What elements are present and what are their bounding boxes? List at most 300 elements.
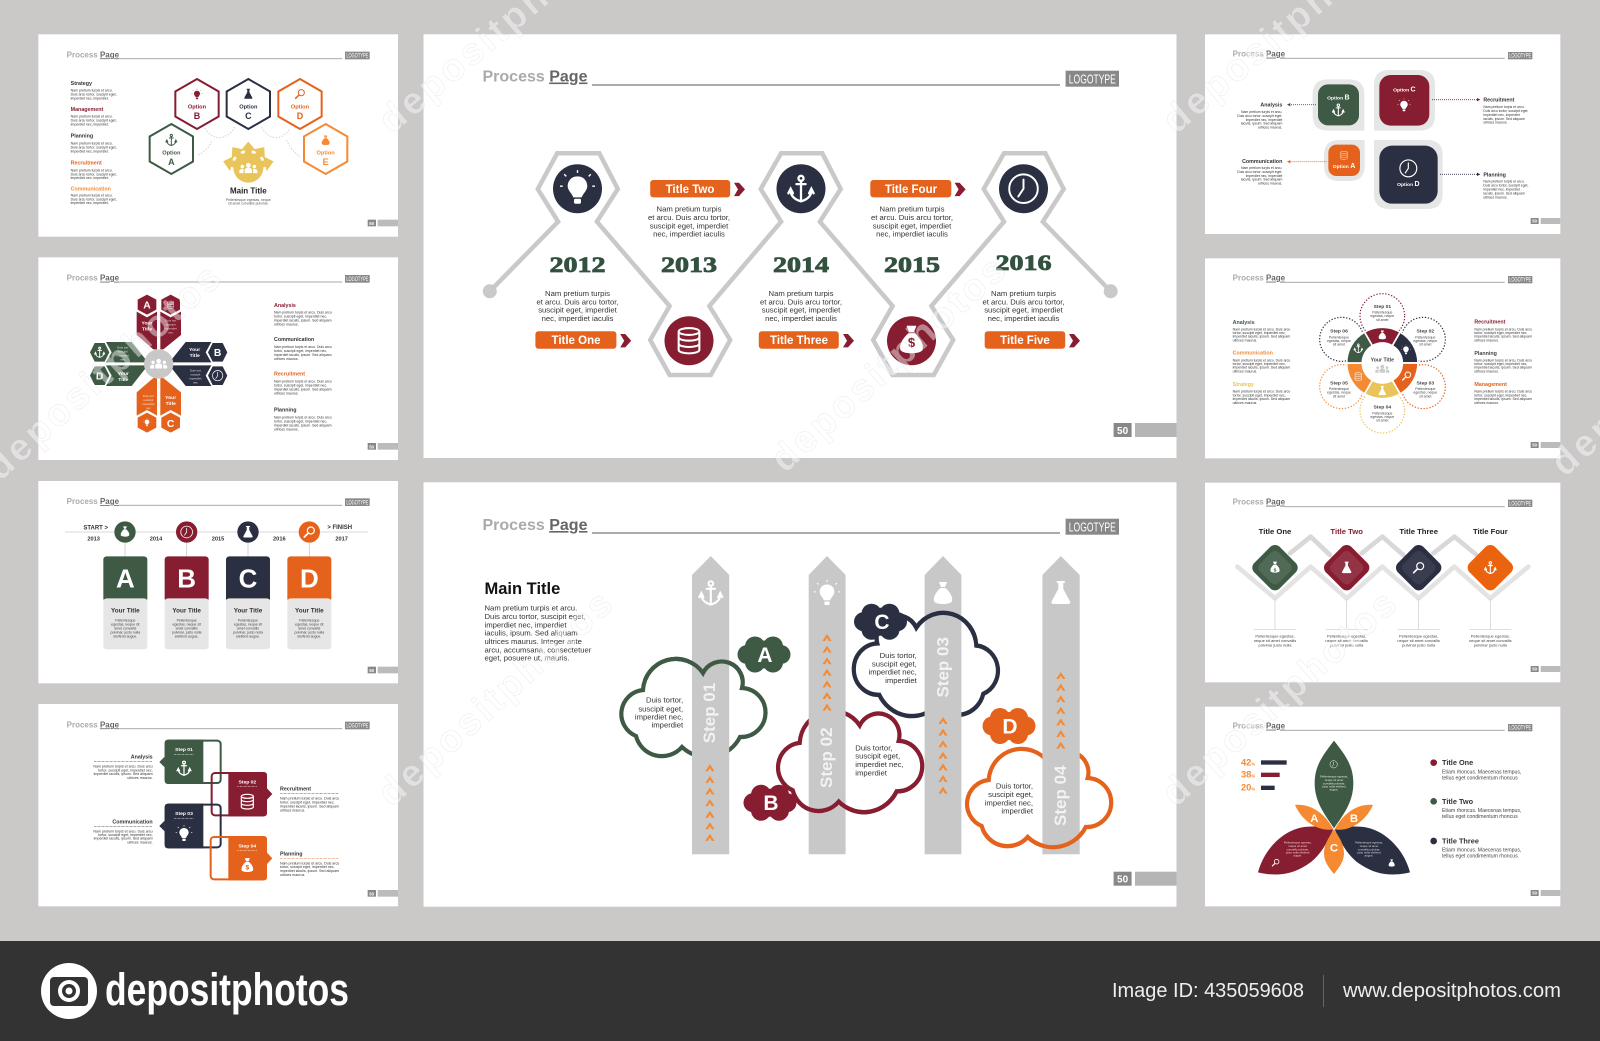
text list: right column: Nam pretium turpis et arcu. Duis arcu: [274, 379, 332, 383]
cloud text A: [635, 696, 684, 730]
step labels: sit amet: [1419, 343, 1431, 347]
leaf: navy right: Pellentesque egestas,: [1355, 841, 1383, 845]
text list: left column: imperdiet nec, imperdiet.: [71, 201, 109, 205]
option B: Option B: [1327, 95, 1350, 102]
arms: maroon: Your: [142, 320, 153, 326]
leaf: maroon left: neque sit amet: [1288, 844, 1307, 848]
watermarks: [0, 0, 1600, 815]
card D: Your Title: [295, 607, 324, 614]
arms: green: [90, 342, 145, 386]
text list: right column: Nam pretium turpis et arcu. Duis arcu: [274, 415, 332, 419]
main title text: [484, 580, 592, 663]
step 01: Step 01: [175, 747, 193, 753]
step labels: sit amet: [1333, 394, 1345, 398]
milestone: Title Three: Title Three: [770, 335, 828, 347]
cloud text B: imperdiet: [855, 768, 888, 777]
slide header: Process Page: [1233, 50, 1286, 59]
label: Recruitment: iaculis, ipsum. Sed aliquam: [1483, 117, 1525, 121]
step labels: egestas, neque: [1413, 391, 1437, 395]
card C: amet convallis: [237, 627, 259, 631]
card C: Your Title: [234, 607, 263, 614]
hexagon: option A: A: [168, 157, 175, 167]
years: 2015: [884, 252, 940, 277]
slide header: LOGOTYPE: [346, 54, 368, 60]
step 03: [159, 804, 221, 848]
milestone: Title Five: et arcu. Duis arcu tortor,: [982, 297, 1065, 306]
callout C: [854, 604, 907, 640]
milestone: Title Two: Title Two: [666, 184, 714, 196]
text list: right: Nam pretium turpis et arcu. Duis arcu: [1474, 390, 1532, 394]
text list: left column: Recruitment: [71, 161, 102, 167]
text list: left: Nam pretium turpis et arcu. Duis arcu: [1233, 390, 1290, 394]
option C: Option C: [1393, 87, 1416, 94]
text: Recruitment: Nam pretium turpis et arcu. Duis arcu: [280, 797, 339, 801]
label: Communication: imperdiet nec, imperdiet: [1246, 174, 1282, 178]
label: Communication: Nam pretium turpis et arcu.: [1241, 166, 1282, 170]
slide header: Process Page: [1233, 274, 1286, 283]
text list: left: [1233, 320, 1290, 405]
timeline: 2016: [273, 537, 286, 543]
label: Analysis: ultrices maurus.: [1258, 126, 1282, 130]
arms: orange: [137, 378, 181, 433]
label: Communication: Communication: [1242, 159, 1282, 165]
callout A: [738, 636, 790, 672]
icon: money bag circle: $: [908, 335, 916, 350]
step labels: sit amet: [1376, 318, 1388, 322]
slide header: [482, 68, 1119, 87]
label: Analysis: [1237, 103, 1282, 130]
milestone: Title One: Nam pretium turpis: [545, 289, 610, 298]
cloud outlines behind arrows: [621, 613, 1111, 847]
milestone: Title Four: nec, imperdiet iaculis: [876, 230, 948, 239]
icon: flask: [237, 521, 259, 543]
text list: right column: Nam pretium turpis et arcu. Duis arcu: [274, 345, 332, 349]
step labels: egestas, neque: [1327, 339, 1351, 343]
bar stats: [1241, 758, 1287, 793]
step 04: Step 04: [238, 843, 256, 849]
arrow: step 03: [925, 556, 961, 854]
arms: navy: B: [214, 348, 221, 359]
hexagon: option D: D: [297, 111, 304, 121]
slide header: [1233, 498, 1532, 507]
label: Communication: ultrices maurus.: [1258, 182, 1282, 186]
text list: right: tortor, suscipit eget, imperdiet nec,: [1474, 331, 1527, 335]
cloud text B: Duis tortor,: [855, 743, 892, 752]
years: 2016: [996, 250, 1052, 275]
label: Planning: ultrices maurus.: [1483, 195, 1508, 199]
text: Communication: tortor, suscipit eget, imperdiet nec,: [98, 833, 153, 837]
cloud text A: Duis tortor,: [646, 696, 683, 705]
legend: Title One: tellus eget condimentum rhoncus: [1442, 775, 1518, 781]
main title: Pellentesque egestas, neque: [226, 198, 271, 202]
text list: right: Management: [1474, 382, 1507, 388]
timeline: START >: [83, 526, 108, 532]
arms: navy: [172, 342, 227, 386]
arms: maroon: suscipit: [166, 323, 176, 327]
timeline: 2015: [212, 537, 224, 543]
text list: left column: Duis arcu tortor, suscipit eget,: [71, 172, 117, 176]
legend: Title Two: tellus eget condimentum rhoncus: [1442, 814, 1518, 820]
slide header: Process Page: [1233, 498, 1286, 507]
text list: left column: [71, 81, 117, 205]
card C: C: [239, 563, 258, 593]
text list: right column: tortor, suscipit eget, imperdiet nec,: [274, 315, 327, 319]
text list: right column: [274, 303, 332, 431]
column: Title Three: pulvinar justo nulla: [1402, 642, 1436, 647]
hexagon: option D: Option: [291, 104, 310, 110]
arms: green: nec: [120, 357, 126, 361]
text list: left column: Strategy: [71, 81, 92, 87]
card B: amet convallis: [176, 627, 198, 631]
panel: six step ring slide: [1205, 258, 1560, 458]
main title text: eget, posuere ut, mauris.: [484, 654, 570, 663]
icon: clock circle: [999, 164, 1048, 213]
column: Title Three: Pellentesque egestas,: [1399, 634, 1438, 639]
text: Planning: imperdiet iaculis, ipsum. Sed aliquam: [280, 869, 339, 873]
milestone: Title Three: suscipit eget, imperdiet: [762, 306, 841, 315]
column: Title Two: neque sit amet convallis: [1325, 638, 1368, 643]
leaf: green top: [1315, 741, 1353, 828]
zigzag lines: [1237, 537, 1528, 598]
cloud text D: Duis tortor,: [996, 782, 1033, 791]
panel: hexagon options slide: [38, 34, 398, 237]
label: Planning: [1483, 173, 1528, 199]
arrowheads: [1287, 98, 1480, 176]
panel: three leaf slide: [1205, 707, 1560, 906]
column: Title Two: Title Two: [1330, 527, 1363, 536]
arrow: step 04: Step 04: [1051, 765, 1070, 826]
text list: right: imperdiet iaculis, ipsum. Sed aliquam: [1474, 397, 1532, 401]
leaf: navy right: convallis pulvinar,: [1358, 847, 1380, 851]
years: 2014: [773, 252, 829, 277]
column: Title One: Title One: [1259, 527, 1291, 536]
label: Analysis: Analysis: [1260, 103, 1282, 109]
column: Title Two: pulvinar justo nulla: [1330, 642, 1364, 647]
divider: [1323, 975, 1324, 1007]
text list: left column: Duis arcu tortor, suscipit eget,: [71, 197, 117, 201]
slide header: LOGOTYPE: [1069, 520, 1116, 534]
page number: [368, 220, 398, 226]
text list: right column: imperdiet iaculis, ipsum. Sed aliquam: [274, 319, 332, 323]
cloud outlines woven over arrows: [621, 613, 1111, 847]
text list: right: Recruitment: [1474, 320, 1506, 326]
text list: right column: Analysis: [274, 303, 296, 309]
milestone: Title One: suscipit eget, imperdiet: [538, 306, 618, 315]
callout C: C: [874, 611, 890, 634]
years: 2012: [550, 252, 606, 277]
column: Title Four: pulvinar justo nulla: [1474, 642, 1508, 647]
icon: center hub: [144, 349, 173, 379]
callout D: [982, 708, 1036, 744]
text: Planning: Nam pretium turpis et arcu. Duis arcu: [280, 861, 339, 865]
milestone: Title Four: Title Four: [885, 184, 938, 196]
dotted step circles: [1320, 294, 1445, 433]
card B: Pellentesque: [177, 619, 197, 623]
panel: interlocked steps slide: [38, 704, 398, 906]
leaf: navy right: augue.: [1365, 854, 1374, 858]
cloud text C: Duis tortor,: [880, 651, 917, 660]
text list: left: tortor, suscipit eget, imperdiet nec,: [1233, 331, 1286, 335]
page number: 50: [369, 668, 375, 673]
timeline: 2013: [87, 537, 100, 543]
text: Recruitment: imperdiet iaculis, ipsum. Sed aliquam: [280, 804, 339, 808]
card A: amet convallis: [114, 627, 137, 631]
milestone: Title Five: [982, 289, 1080, 349]
milestone: Title Three: Nam pretium turpis: [769, 289, 834, 298]
leaf: maroon left: Pellentesque egestas,: [1284, 841, 1312, 845]
card D: eleifend augue.: [297, 634, 321, 638]
step labels: sit amet: [1333, 343, 1345, 347]
leaf: green top: Pellentesque egestas,: [1320, 775, 1348, 779]
callout B: [744, 785, 796, 821]
page number: 50: [369, 444, 375, 449]
arms: maroon: Duis tort: [165, 319, 176, 323]
text: Analysis: ultrices maurus.: [127, 776, 153, 780]
years: [550, 250, 1052, 277]
text: Analysis: [93, 755, 153, 780]
cloud text B: [855, 743, 904, 777]
milestone: Title One: nec, imperdiet iaculis: [542, 314, 614, 323]
column: Title One: Pellentesque egestas,: [1255, 634, 1295, 639]
text list: left column: Nam pretium turpis et arcu.: [71, 193, 113, 197]
arrow: step 02: Step 02: [817, 727, 836, 788]
option D: [1374, 140, 1443, 209]
page number: 50: [369, 221, 375, 226]
page number: [1114, 423, 1176, 437]
icon: anchor circle: [776, 164, 826, 213]
label: Communication: iaculis, ipsum. Sed aliquam: [1241, 178, 1282, 182]
text list: left: Strategy: [1233, 382, 1254, 388]
text: Recruitment: Recruitment: [280, 787, 311, 793]
page number: 50: [1532, 891, 1538, 896]
cloud text D: suscipit eget,: [988, 790, 1033, 799]
main title text: Nam pretium turpis et arcu.: [484, 604, 577, 613]
slide header: LOGOTYPE: [1069, 72, 1116, 86]
arms: orange: suscipit: [143, 398, 153, 402]
card C: Pellentesque: [238, 619, 258, 623]
column: Title Three: neque sit amet convallis: [1397, 638, 1440, 643]
text list: left column: imperdiet nec, imperdiet.: [71, 122, 109, 126]
label: Planning: iaculis, ipsum. Sed aliquam: [1483, 192, 1525, 196]
text list: left: tortor, suscipit eget, imperdiet nec,: [1233, 362, 1286, 366]
milestone: Title Four: [870, 180, 966, 239]
panel: arrows and clouds slide: [424, 482, 1176, 907]
page number: [368, 443, 398, 450]
option B: [1313, 79, 1364, 131]
column: Title Two: Pellentesque egestas,: [1327, 634, 1366, 639]
text list: left: Communication: [1233, 351, 1273, 357]
card D: egestas, neque sit: [295, 623, 323, 627]
legend: Title Two: Etiam rhoncus. Maecenas tempus,: [1442, 808, 1521, 814]
text list: right: Nam pretium turpis et arcu. Duis arcu: [1474, 327, 1532, 331]
text list: left: Analysis: [1233, 320, 1255, 326]
arms: maroon: Title: [142, 326, 152, 332]
slide header: LOGOTYPE: [346, 277, 368, 283]
card B: pulvinar, justo nulla: [172, 631, 202, 635]
icon: money bag: [114, 521, 136, 543]
card B: B: [177, 563, 196, 593]
arms: navy: Your: [189, 347, 200, 353]
arms: green: D: [96, 371, 104, 382]
timeline: 2014: [150, 537, 163, 543]
text: Planning: Planning: [280, 851, 302, 857]
main title text: imperdiet nec, imperdiet: [484, 620, 567, 629]
arms: orange: Duis tort: [143, 394, 154, 398]
slide header: Process Page: [67, 50, 120, 59]
step labels: Pellentesque: [1415, 387, 1435, 391]
hexagon: option A: [150, 124, 193, 174]
text list: right column: imperdiet iaculis, ipsum. Sed aliquam: [274, 387, 332, 391]
option A: [1324, 140, 1365, 181]
text list: right: Nam pretium turpis et arcu. Duis arcu: [1474, 358, 1532, 362]
text list: left: imperdiet iaculis, ipsum. Sed aliquam: [1233, 366, 1290, 370]
slide header: [1233, 50, 1532, 60]
main title text: iaculis, ipsum. Sed aliquam: [484, 629, 578, 638]
slide header: LOGOTYPE: [346, 500, 368, 506]
step labels: Step 04: [1373, 405, 1391, 411]
arrow: step 01: [692, 556, 729, 854]
hexagon: option E: Option: [317, 151, 335, 157]
label: Analysis: Duis arcu tortor, suscipit eget,: [1237, 114, 1282, 118]
page number: 50: [1117, 875, 1129, 886]
text list: right column: imperdiet iaculis, ipsum. Sed aliquam: [274, 423, 332, 427]
card D: [287, 556, 331, 649]
cloud text B: suscipit eget,: [855, 752, 900, 761]
page number: [368, 667, 398, 673]
text list: right column: ultrices maurus.: [274, 357, 299, 361]
milestone: Title Four: Nam pretium turpis: [880, 205, 945, 214]
brand name: depositphotos: [105, 964, 349, 1015]
text list: right column: tortor, suscipit eget, imperdiet nec,: [274, 419, 327, 423]
callout A: A: [757, 644, 773, 667]
footer bar: [0, 941, 1600, 1041]
text list: right: imperdiet iaculis, ipsum. Sed aliquam: [1474, 335, 1532, 339]
text list: right: ultrices maurus.: [1474, 401, 1499, 405]
label: Recruitment: ultrices maurus.: [1483, 121, 1508, 125]
arms: green: Title: [118, 377, 129, 383]
leaf: green top: neque sit amet: [1325, 778, 1343, 782]
card A: egestas, neque sit: [111, 623, 139, 627]
column: Title One: neque sit amet convallis: [1254, 638, 1296, 643]
leaf: navy right: justo nulla eleifend: [1356, 850, 1381, 854]
step labels: Step 06: [1330, 329, 1348, 335]
slide header: [67, 720, 370, 730]
zigzag hexagon line: [483, 153, 1118, 375]
arms: navy: nec: [193, 380, 198, 384]
cloud text A: suscipit eget,: [638, 704, 683, 713]
text: Planning: ultrices maurus.: [280, 873, 305, 877]
slide header: LOGOTYPE: [1509, 278, 1531, 284]
card C: eleifend augue.: [236, 634, 260, 638]
option D: Option D: [1397, 181, 1420, 188]
center title: Your Title: [1371, 357, 1394, 363]
callout D: D: [1002, 716, 1018, 738]
leaf: maroon left: augue.: [1293, 854, 1302, 858]
text list: left: ultrices maurus.: [1233, 370, 1257, 374]
hexagon: option E: [304, 124, 347, 174]
column: Title Four: Title Four: [1473, 527, 1508, 536]
text list: left: imperdiet iaculis, ipsum. Sed aliquam: [1233, 397, 1290, 401]
card C: pulvinar, justo nulla: [233, 631, 263, 635]
text list: right: tortor, suscipit eget, imperdiet nec,: [1474, 362, 1527, 366]
arms: orange: nec: [146, 406, 151, 410]
petal A: [1295, 805, 1333, 830]
milestone: Title Five: suscipit eget, imperdiet: [984, 306, 1064, 315]
milestone: Title Three: et arcu. Duis arcu tortor,: [760, 297, 842, 306]
text: Recruitment: [280, 787, 339, 812]
arms: maroon: imperdiet: [165, 327, 177, 331]
milestone: Title One: Title One: [552, 335, 600, 347]
cloud text D: imperdiet: [1001, 807, 1034, 816]
main title: sit amet convallis pulvinar.: [228, 202, 269, 206]
step 04: $: [245, 865, 249, 872]
panel: A B C D timeline slide: [38, 481, 398, 683]
center title: [1371, 357, 1394, 373]
slide header: [67, 50, 370, 60]
card C: egestas, neque sit: [234, 623, 262, 627]
icon: magnifier: [299, 521, 320, 543]
dotted connectors: [198, 127, 300, 157]
card A: Pellentesque: [115, 619, 135, 623]
step labels: Pellentesque: [1372, 310, 1392, 314]
petal B: B: [1350, 813, 1358, 825]
slide header: LOGOTYPE: [1509, 501, 1531, 507]
timeline: [65, 525, 368, 557]
label: Planning: Planning: [1483, 173, 1506, 179]
text list: left column: Nam pretium turpis et arcu.: [71, 89, 113, 93]
option A: Option A: [1333, 163, 1355, 170]
text list: left: tortor, suscipit eget, imperdiet nec,: [1233, 393, 1286, 397]
text list: right column: imperdiet iaculis, ipsum. Sed aliquam: [274, 353, 332, 357]
dotted arrows: [1289, 100, 1479, 174]
cloud text D: imperdiet nec,: [985, 798, 1033, 807]
arms: orange: C: [167, 419, 175, 430]
main title text: Main Title: [484, 580, 560, 598]
main title: [226, 186, 271, 206]
column: Title Three: [1393, 527, 1444, 647]
card A: pulvinar, justo nulla: [111, 631, 140, 635]
text list: left column: Management: [71, 107, 103, 113]
label: Communication: Duis arcu tortor, suscipit eget,: [1237, 170, 1282, 174]
panel: cross arms slide: [38, 257, 398, 460]
text list: left column: Nam pretium turpis et arcu.: [71, 168, 113, 172]
icon: camera logo: [41, 963, 97, 1019]
slide header: Process Page: [67, 274, 120, 283]
arms: navy: imperdiet: [189, 376, 202, 380]
leaf: maroon left: [1258, 826, 1333, 875]
cloud text B: imperdiet nec,: [855, 760, 904, 769]
text: Communication: ultrices maurus.: [127, 840, 153, 844]
label: Recruitment: Recruitment: [1483, 98, 1515, 104]
card B: eleifend augue.: [175, 634, 199, 638]
text list: right: ultrices maurus.: [1474, 339, 1499, 343]
column: Title Three: Title Three: [1399, 527, 1438, 536]
hexagon: option C: [227, 79, 270, 129]
label: Recruitment: Nam pretium turpis et arcu.: [1483, 105, 1525, 109]
label: Analysis: imperdiet nec, imperdiet: [1246, 118, 1282, 122]
card A: [103, 556, 147, 649]
leaf: maroon left: justo nulla eleifend: [1285, 850, 1310, 854]
step labels: egestas, neque: [1370, 314, 1394, 318]
text: Planning: [280, 851, 339, 877]
main title text: arcu, accumsana, consectetuer: [484, 645, 592, 654]
text list: left: Nam pretium turpis et arcu. Duis arcu: [1233, 327, 1290, 331]
milestone: Title Two: suscipit eget, imperdiet: [650, 221, 729, 230]
milestone: Title Four: suscipit eget, imperdiet: [873, 221, 952, 230]
arms: navy: Duis tort: [190, 368, 201, 372]
text list: left: imperdiet iaculis, ipsum. Sed aliquam: [1233, 335, 1290, 339]
text list: left column: imperdiet nec, imperdiet.: [71, 176, 109, 180]
